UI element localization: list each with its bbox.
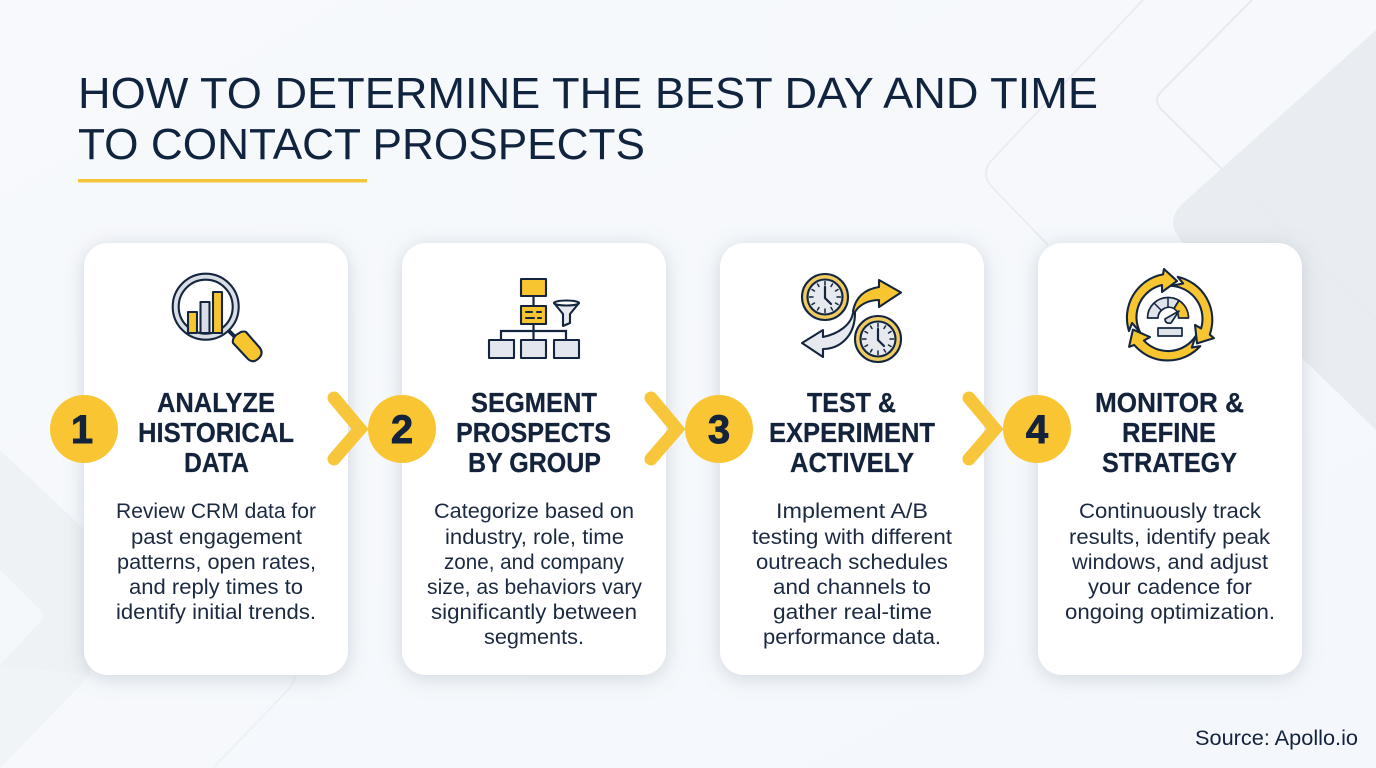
- description: past engagement: [131, 525, 302, 549]
- badge: 4: 4: [1026, 408, 1049, 452]
- description: performance data.: [763, 625, 941, 649]
- heading: STRATEGY: [1102, 447, 1237, 478]
- icon: clocks and arrows: [802, 274, 901, 362]
- heading: BY GROUP: [468, 447, 601, 478]
- panel: monitor and refine: [1038, 243, 1302, 675]
- panel: segment prospects: [402, 243, 666, 675]
- heading: MONITOR &: [1095, 387, 1244, 418]
- heading: [456, 387, 611, 478]
- clock upper left: [802, 274, 848, 320]
- badge: 2: [368, 395, 436, 463]
- description: outreach schedules: [756, 550, 948, 574]
- description: ongoing optimization.: [1065, 600, 1275, 624]
- title: HOW TO DETERMINE THE BEST DAY AND TIME: [78, 69, 1098, 118]
- badge: 2: 2: [391, 408, 413, 452]
- description: size, as behaviors vary: [427, 575, 642, 599]
- heading: DATA: [184, 447, 249, 478]
- arrow: step 2 to 3: [651, 398, 677, 459]
- clock lower right: [855, 316, 901, 362]
- description: and channels to: [773, 575, 931, 599]
- heading: TEST &: [807, 387, 896, 418]
- description: windows, and adjust: [1071, 550, 1268, 574]
- heading: ANALYZE: [157, 387, 275, 418]
- badge: 1: [50, 395, 118, 463]
- badge: 3: [685, 395, 753, 463]
- description: gather real-time: [773, 600, 932, 624]
- badge: 3: 3: [708, 408, 730, 452]
- arrow gray: [802, 313, 855, 357]
- description: your cadence for: [1088, 575, 1252, 599]
- description: [752, 499, 952, 649]
- icon: org chart and funnel: [489, 279, 579, 358]
- heading: [769, 387, 935, 478]
- source note: Source: Apollo.io: [1195, 727, 1358, 750]
- title underline: [78, 179, 367, 182]
- badge: 4: [1003, 395, 1071, 463]
- arrow: step 1 to 2: [334, 398, 360, 459]
- heading: PROSPECTS: [456, 417, 611, 448]
- heading: REFINE: [1122, 417, 1216, 448]
- description: Categorize based on: [434, 499, 634, 523]
- description: [116, 499, 316, 624]
- heading: ACTIVELY: [790, 447, 914, 478]
- heading: SEGMENT: [471, 387, 597, 418]
- heading: HISTORICAL: [138, 417, 294, 448]
- description: identify initial trends.: [116, 600, 316, 624]
- description: results, identify peak: [1069, 525, 1270, 549]
- description: Implement A/B: [776, 499, 928, 523]
- panel: test and experiment: [720, 243, 984, 675]
- description: industry, role, time: [445, 525, 624, 549]
- panel: analyze historical data: [84, 243, 348, 675]
- description: [1065, 499, 1275, 624]
- description: segments.: [484, 625, 584, 649]
- arrow yellow: [853, 280, 901, 314]
- heading: [138, 387, 294, 478]
- description: and reply times to: [129, 575, 303, 599]
- icon: cycle arrows and gauge: [1123, 269, 1232, 379]
- title: [78, 69, 1098, 169]
- description: Review CRM data for: [116, 499, 316, 523]
- title: TO CONTACT PROSPECTS: [78, 120, 645, 169]
- icon: magnifier with bar chart: [173, 274, 262, 361]
- arrow: step 3 to 4: [969, 398, 995, 459]
- badge: 1: 1: [71, 408, 93, 452]
- description: Continuously track: [1079, 499, 1261, 523]
- heading: [1095, 387, 1244, 478]
- description: patterns, open rates,: [117, 550, 316, 574]
- description: zone, and company: [444, 550, 624, 574]
- heading: EXPERIMENT: [769, 417, 935, 448]
- description: testing with different: [752, 525, 952, 549]
- description: significantly between: [431, 600, 637, 624]
- description: [427, 499, 642, 649]
